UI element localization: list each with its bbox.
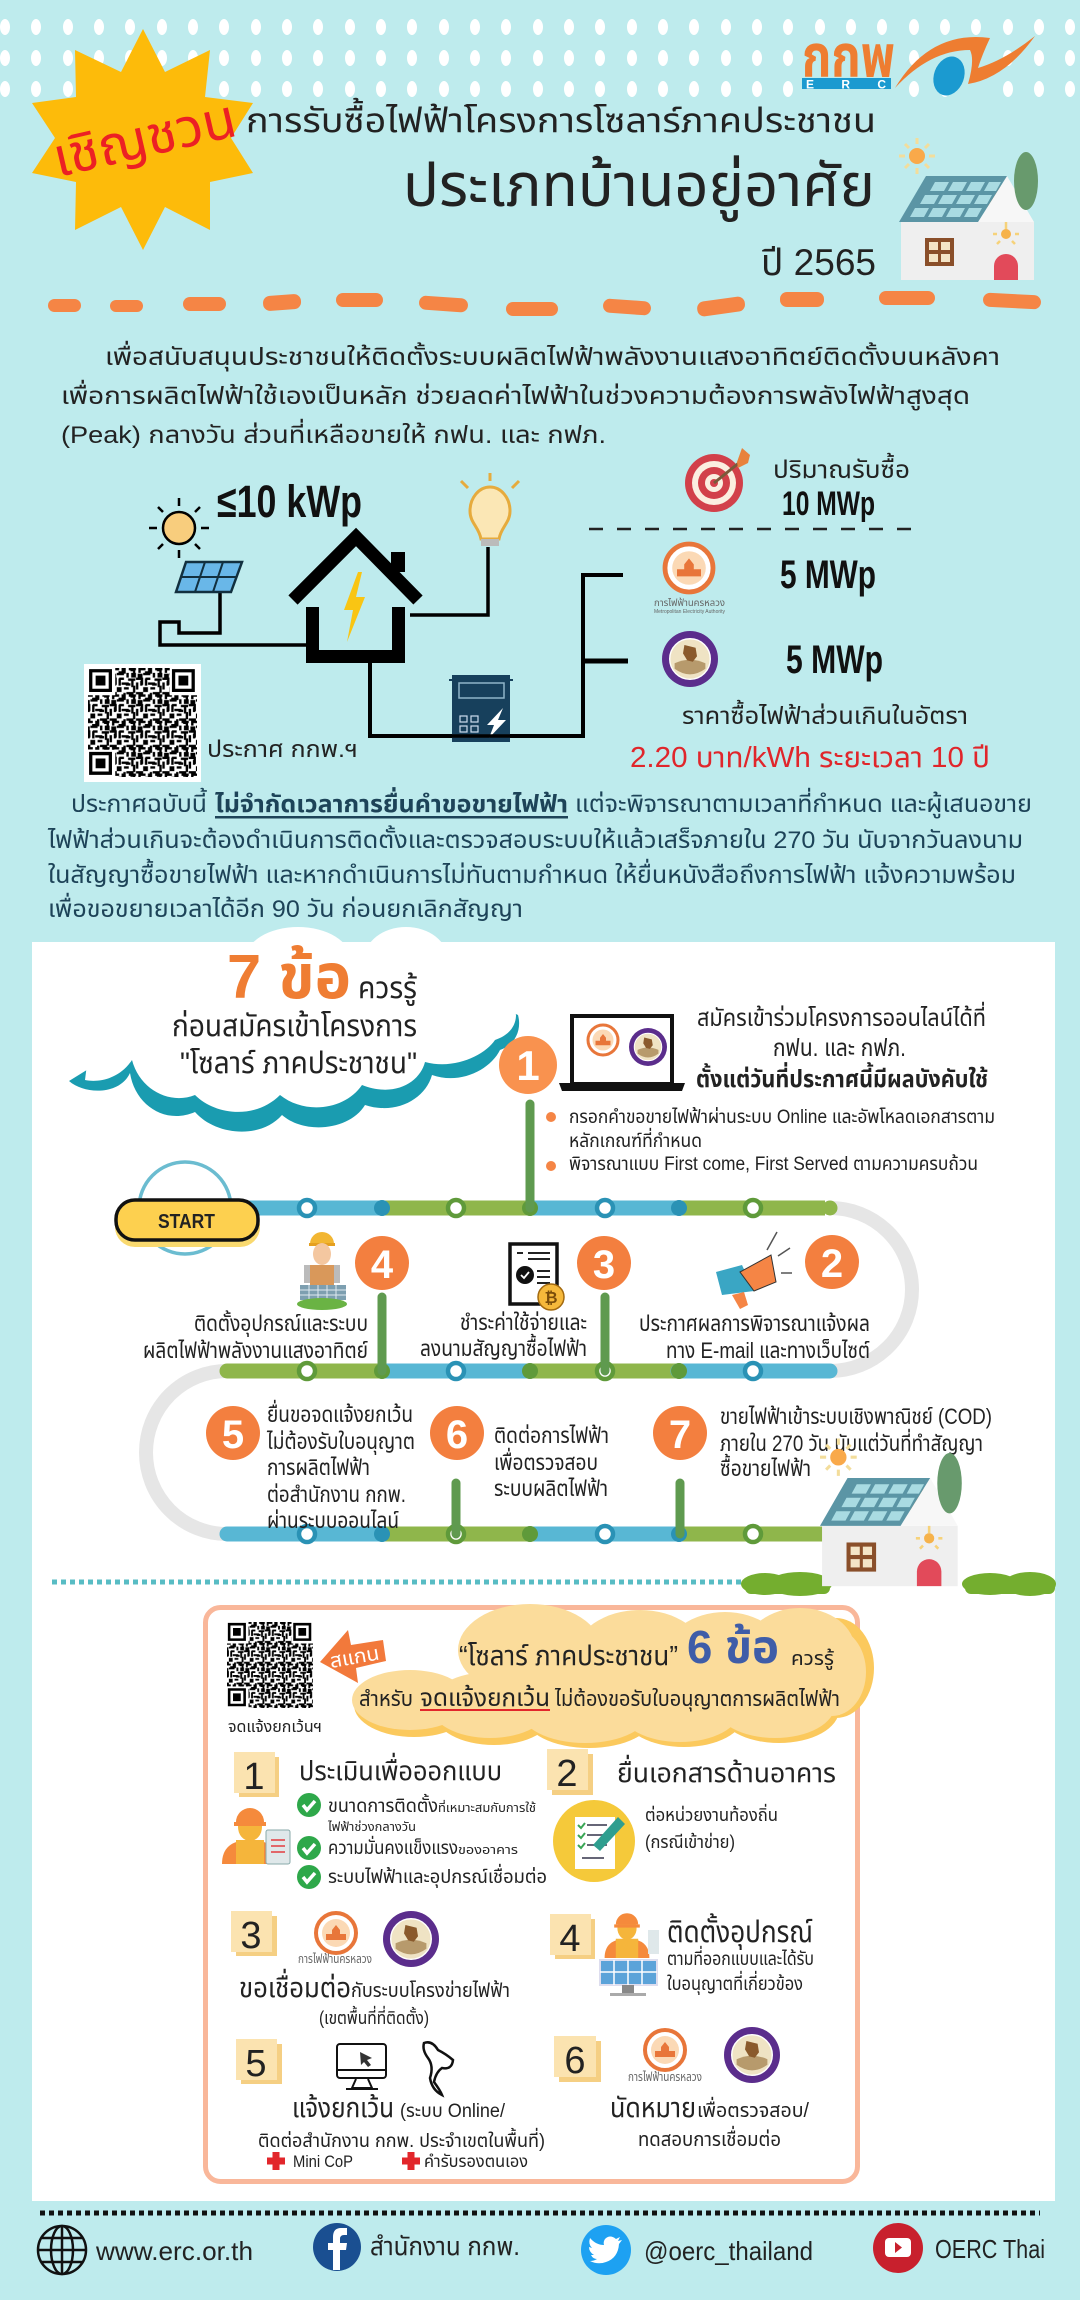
decorative dot rows: [0, 19, 1075, 97]
icon: document and coin: ₿: [544, 1289, 558, 1307]
step 3: ลงนามสัญญาซื้อไฟฟ้า: [420, 1333, 587, 1361]
step 7: 7: [669, 1413, 691, 1457]
intro paragraph: [61, 340, 1000, 449]
step 5 text: ไม่ต้องรับใบอนุญาต: [266, 1429, 415, 1455]
header text: สำหรับ: [359, 1688, 413, 1711]
icon: monitor: [337, 2044, 386, 2089]
step 5: [206, 1399, 415, 1533]
step 7: [653, 1404, 992, 1481]
notice paragraph: ไม่จำกัดเวลาการยื่นคำขอขายไฟฟ้า: [215, 787, 568, 818]
step 7 text: ซื้อขายไฟฟ้า: [720, 1453, 811, 1481]
item 4: ใบอนุญาตที่เกี่ยวข้อง: [667, 1970, 803, 1995]
footer: youtube: OERC Thai: [935, 2234, 1045, 2264]
logo: ERC: [802, 23, 1035, 100]
purchase target text: [773, 452, 910, 523]
header text: [359, 1621, 840, 1712]
icon: technician with panel: [297, 1232, 347, 1310]
footer: facebook: [313, 2223, 520, 2271]
item 5: 5: [245, 2043, 267, 2085]
dotted divider: [52, 1580, 745, 1584]
item 2: ยื่นเอกสารด้านอาคาร: [617, 1754, 836, 1788]
icon: Thailand map: [424, 2042, 453, 2095]
step 6 text: [494, 1423, 609, 1501]
notice paragraph: ในสัญญาซื้อขายไฟฟ้า และหากดำเนินการไม่ทันตามกำหนด ให้ยื่นหนังสือถึงการไฟฟ้า แจ้งความพร้อม: [48, 858, 1016, 889]
scan arrow: [320, 1630, 386, 1683]
notice paragraph: ประกาศฉบับนี้: [71, 787, 207, 818]
starburst badge: [32, 29, 253, 250]
title: ประเภทบ้านอยู่อาศัย: [403, 152, 875, 222]
item 3: [231, 1911, 510, 2028]
qr caption: จดแจ้งยกเว้นฯ: [228, 1719, 322, 1736]
header text: ไม่ต้องขอรับใบอนุญาตการผลิตไฟฟ้า: [554, 1687, 840, 1712]
step 4: ผลิตไฟฟ้าพลังงานแสงอาทิตย์: [143, 1338, 368, 1363]
header text: “โซลาร์ ภาคประชาชน”: [459, 1640, 678, 1671]
icon: solar panel: [176, 562, 242, 592]
item 6: เพื่อตรวจสอบ/: [697, 2096, 809, 2122]
item 6: นัดหมาย: [610, 2092, 696, 2123]
item 5: (ระบบ Online/: [400, 2101, 506, 2122]
header text: 6 ข้อ: [687, 1621, 779, 1673]
icon: engineer with panel: [600, 1913, 659, 1996]
notice paragraph: [47, 787, 1032, 923]
logo: MEA: Metropolitan Electricity Authority: [654, 609, 725, 615]
checklist: ที่เหมาะสมกับการใช้: [438, 1799, 536, 1815]
step 1: 1: [516, 1042, 540, 1089]
label: max capacity: ≤10 kWp: [217, 476, 362, 527]
icon: engineer: [222, 1808, 290, 1864]
footer: youtube: [873, 2223, 1045, 2273]
item 5: คำรับรองตนเอง: [424, 2152, 528, 2171]
grey track curves: [146, 1208, 912, 1534]
item 3: 3: [240, 1915, 262, 1957]
footer: twitter: [581, 2225, 813, 2275]
step 2 text: ประกาศผลการพิจารณาแจ้งผล: [639, 1311, 870, 1336]
step 7 text: [720, 1404, 992, 1481]
step 5 text: การผลิตไฟฟ้า: [267, 1455, 370, 1480]
green connector stems: [382, 1104, 680, 1534]
intro paragraph: เพื่อสนับสนุนประชาชนให้ติดตั้งระบบผลิตไฟฟ้าพลังงานแสงอาทิตย์ติดตั้งบนหลังคา: [105, 340, 1000, 372]
icon: document and coin: [510, 1244, 564, 1310]
orange dashed divider: [48, 291, 1041, 317]
step 1 text: [696, 1001, 988, 1093]
checklist: ของอาคาร: [458, 1843, 518, 1857]
item 4: 4: [559, 1918, 581, 1960]
icon: checklist document: [553, 1800, 635, 1882]
step 7 text: ขายไฟฟ้าเข้าระบบเชิงพาณิชย์ (COD): [720, 1404, 992, 1429]
item 5: [236, 2039, 545, 2171]
item 5: แจ้งยกเว้น: [292, 2092, 394, 2123]
title: การรับซื้อไฟฟ้าโครงการโซลาร์ภาคประชาชน: [246, 97, 876, 140]
cloud heading backdrop: [69, 927, 519, 1132]
icon: solar house: [899, 138, 1038, 280]
logo: ERC: ERC: [806, 78, 886, 92]
yellow cloud header: [352, 1604, 874, 1748]
item 2: ต่อหน่วยงานท้องถิ่น: [645, 1803, 778, 1825]
checklist: [297, 1793, 547, 1889]
step 3: 3: [593, 1243, 615, 1287]
grass: [741, 1572, 1056, 1596]
item 2: 2: [556, 1753, 578, 1795]
step 6 text: ระบบผลิตไฟฟ้า: [494, 1476, 608, 1501]
white panel: [32, 942, 1055, 2201]
start badge: [115, 1162, 260, 1254]
diagram: system wiring: [160, 547, 628, 736]
step 5 text: ต่อสำนักงาน กกพ.: [267, 1482, 406, 1507]
icon: house with lightning: [293, 537, 418, 663]
footer: website: www.erc.or.th: [95, 2236, 253, 2266]
qr code: exemption: [227, 1622, 322, 1736]
step 4: 4: [371, 1243, 394, 1287]
icon: sun: [149, 498, 209, 558]
icon: finish house: [820, 1438, 962, 1586]
notice paragraph: แต่จะพิจารณาตามเวลาที่กำหนด และผู้เสนอขาย: [575, 787, 1032, 819]
item 3: (เขตพื้นที่ที่ติดตั้ง): [319, 2005, 429, 2028]
footer dotted rule: [40, 2210, 1040, 2216]
footer: facebook: สำนักงาน กกพ.: [370, 2231, 520, 2261]
step 5 text: ผ่านระบบออนไลน์: [267, 1508, 399, 1533]
item 4: ติดตั้งอุปกรณ์: [667, 1913, 813, 1950]
step 1 bullets: กรอกคำขอขายไฟฟ้าผ่านระบบ Online และอัพโหลดเอกสารตาม: [569, 1105, 995, 1128]
item 3: กับระบบโครงข่ายไฟฟ้า: [351, 1979, 510, 2002]
step 1 bullets: พิจารณาแบบ First come, First Served ตามความครบถ้วน: [569, 1152, 978, 1175]
price value: 2.20 บาท/kWh ระยะเวลา 10 ปี: [630, 742, 990, 774]
item 4: [550, 1913, 814, 1996]
logo: MEA: การไฟฟ้านครหลวง: [654, 597, 725, 609]
PEA quota: 5 MWp: [786, 638, 883, 682]
step 1 text: ตั้งแต่วันที่ประกาศนี้มีผลบังคับใช้: [696, 1062, 988, 1093]
icon: electric meter: [370, 675, 583, 742]
heading: 7 items: [172, 943, 417, 1080]
icon: laptop: [559, 1016, 685, 1091]
step 1 bullets: หลักเกณฑ์ที่กำหนด: [569, 1127, 702, 1152]
step 4 text: ติดตั้งอุปกรณ์และระบบ: [194, 1309, 368, 1337]
step 6 text: เพื่อตรวจสอบ: [494, 1447, 598, 1475]
step 3: [420, 1236, 631, 1361]
step 7 text: ภายใน 270 วัน นับแต่วันที่ทำสัญญา: [720, 1428, 983, 1456]
checklist: ความมั่นคงแข็งแรง: [328, 1835, 458, 1859]
item 4: ตามที่ออกแบบและได้รับ: [667, 1945, 814, 1970]
step 1: [499, 1001, 995, 1175]
footer: website: [38, 2226, 253, 2274]
item 6: 6: [564, 2040, 586, 2082]
icon: megaphone: [716, 1232, 792, 1309]
step 4: [143, 1232, 409, 1363]
step 1 text: กฟน. และ กฟภ.: [773, 1035, 906, 1062]
scan arrow: สแกน: [328, 1643, 381, 1673]
item 6: ทดสอบการเชื่อมต่อ: [638, 2125, 781, 2151]
item 5: Mini CoP: [293, 2152, 353, 2171]
price caption: ราคาซื้อไฟฟ้าส่วนเกินในอัตรา: [682, 699, 968, 730]
logo: MEA: [654, 544, 725, 615]
step 2: ทาง E-mail และทางเว็บไซต์: [666, 1338, 870, 1363]
item 1: ประเมินเพื่อออกแบบ: [299, 1752, 502, 1786]
item 5: ติดต่อสำนักงาน กกพ. ประจำเขตในพื้นที่): [258, 2127, 545, 2152]
step 5: 5: [222, 1413, 244, 1457]
heading: 7 items: ก่อนสมัครเข้าโครงการ: [172, 1010, 417, 1043]
intro paragraph: (Peak) กลางวัน ส่วนที่เหลือขายให้ กฟน. และ กฟภ.: [61, 418, 606, 449]
item 6: การไฟฟ้านครหลวง: [628, 2070, 702, 2084]
item 2: [547, 1749, 836, 1882]
panel: six steps box: [206, 1608, 858, 2182]
item 3: การไฟฟ้านครหลวง: [298, 1952, 372, 1966]
item 2: (กรณีเข้าข่าย): [645, 1832, 735, 1852]
track row 1: [248, 1200, 838, 1216]
qr code: notice: [84, 664, 201, 782]
checklist: ขนาดการติดตั้ง: [328, 1793, 438, 1817]
title: ปี 2565: [761, 242, 876, 283]
step 2: 2: [821, 1242, 843, 1286]
item 1: 1: [243, 1756, 265, 1798]
step 3 text: ชำระค่าใช้จ่ายและ: [460, 1310, 587, 1335]
item 3: ขอเชื่อมต่อ: [239, 1968, 351, 2003]
track row 2: [227, 1363, 830, 1379]
step 5 text: [266, 1399, 415, 1533]
step 1 text: สมัครเข้าร่วมโครงการออนไลน์ได้ที่: [697, 1001, 986, 1032]
step 5 text: ยื่นขอจดแจ้งยกเว้น: [267, 1399, 413, 1427]
MEA quota: 5 MWp: [780, 553, 876, 597]
title: [246, 97, 876, 283]
heading: 7 items: "โซลาร์ ภาคประชาชน": [180, 1047, 417, 1080]
purchase target text: ปริมาณรับซื้อ: [773, 452, 910, 484]
step 1 bullets: [546, 1105, 995, 1175]
track row 3: [227, 1526, 823, 1542]
purchase target text: 10 MWp: [782, 485, 875, 523]
header text: จดแจ้งยกเว้น: [420, 1684, 550, 1712]
step 2: [639, 1232, 870, 1363]
item 6: [554, 2027, 809, 2151]
icon: light bulb: [461, 473, 519, 546]
heading: 7 items: 7 ข้อ: [227, 943, 351, 1012]
heading: 7 items: ควรรู้: [358, 972, 417, 1006]
intro paragraph: เพื่อการผลิตไฟฟ้าใช้เองเป็นหลัก ช่วยลดค่าไฟฟ้าในช่วงความต้องการพลังไฟฟ้าสูงสุด: [61, 379, 970, 411]
step 6: [430, 1406, 609, 1501]
item 1: [222, 1752, 547, 1889]
start badge: START: [158, 1211, 215, 1233]
logo: PEA: [662, 631, 718, 687]
badge word: เชิญชวน: [47, 88, 242, 189]
icon: target: [685, 448, 750, 512]
notice paragraph: เพื่อขอขยายเวลาได้อีก 90 วัน ก่อนยกเลิกสัญญา: [48, 892, 523, 923]
checklist: ระบบไฟฟ้าและอุปกรณ์เชื่อมต่อ: [328, 1863, 547, 1888]
checklist: ไฟฟ้าช่วงกลางวัน: [327, 1820, 416, 1834]
header text: ควรรู้: [791, 1647, 834, 1671]
qr caption: ประกาศ กกพ.ฯ: [207, 736, 358, 762]
notice paragraph: ไฟฟ้าส่วนเกินจะต้องดำเนินการติดตั้งและตรวจสอบระบบให้แล้วเสร็จภายใน 270 วัน นับจากวันลงนาม: [47, 824, 1023, 854]
step 6: 6: [446, 1413, 468, 1457]
footer: twitter: @oerc_thailand: [644, 2236, 813, 2266]
step 6 text: ติดต่อการไฟฟ้า: [494, 1423, 609, 1448]
logo: ERC: กกพ: [802, 23, 895, 90]
